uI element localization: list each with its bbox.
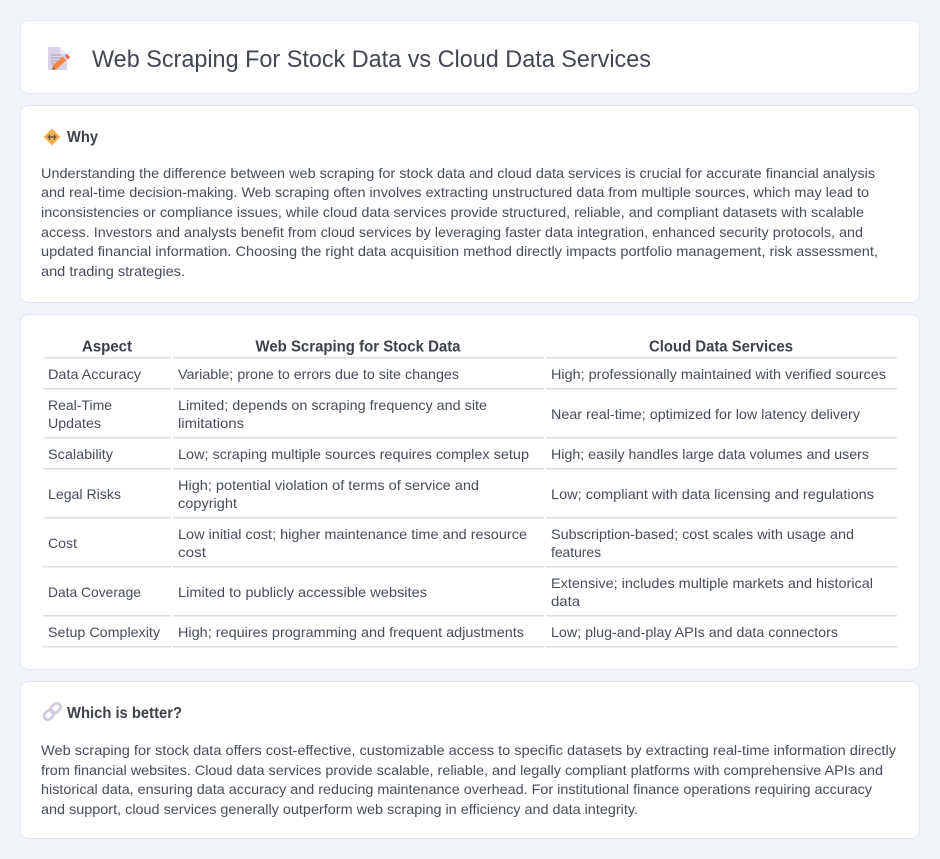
row: legal risks: High; potential violation of terms of service and [178, 477, 479, 493]
panel: header [20, 20, 920, 94]
text block: why paragraph: inconsistencies or compliance issues, while cloud data services provide structured, reliable, and compliant datasets with scalable [41, 204, 864, 220]
title: Web Scraping For Stock Data vs Cloud Data Services [92, 46, 651, 73]
icon: document with pencil [48, 47, 70, 70]
row: setup complexity [48, 624, 838, 640]
row: legal risks: copyright [178, 495, 237, 511]
panel: why [20, 106, 920, 302]
text block: verdict paragraph [41, 742, 896, 817]
row: real-time updates: Near real-time; optimized for low latency delivery [551, 406, 860, 422]
table header row: Cloud Data Services [649, 338, 793, 356]
icon: diamond warning sign [44, 128, 60, 146]
table header row: Web Scraping for Stock Data [256, 338, 461, 356]
panel: comparison table [20, 314, 920, 670]
row: setup complexity: High; requires programming and frequent adjustments [178, 624, 524, 640]
table header row: Aspect [82, 338, 133, 356]
row: real-time updates [48, 397, 860, 431]
row: data accuracy: Variable; prone to errors due to site changes [178, 366, 459, 382]
text block: verdict paragraph: and support, cloud services generally outperform web scraping in efficiency and data integrity. [41, 801, 638, 817]
row: setup complexity: Setup Complexity [48, 624, 160, 640]
row: real-time updates: limitations [178, 415, 244, 431]
row: data accuracy: High; professionally maintained with verified sources [551, 366, 886, 382]
row: scalability: High; easily handles large data volumes and users [551, 446, 869, 462]
row: real-time updates: Real-Time [48, 397, 112, 413]
panel: which is better [20, 682, 920, 838]
text block: why paragraph [41, 165, 878, 279]
heading: why: Why [67, 129, 98, 146]
icon: chain link [42, 702, 62, 721]
row: scalability: Scalability [48, 446, 113, 462]
text block: why paragraph: and trading strategies. [41, 263, 185, 279]
row: real-time updates: Updates [48, 415, 101, 431]
row: cost: features [551, 544, 601, 560]
row: data accuracy [48, 366, 886, 382]
row: cost: Cost [48, 535, 77, 551]
row: data coverage [48, 575, 873, 609]
row: cost [48, 526, 854, 560]
row: cost: cost [178, 544, 206, 560]
row: scalability: Low; scraping multiple sources requires complex setup [178, 446, 529, 462]
row: cost: Low initial cost; higher maintenance time and resource [178, 526, 527, 542]
row: setup complexity: Low; plug-and-play APIs and data connectors [551, 624, 838, 640]
row: data coverage: Data Coverage [48, 584, 141, 600]
row: scalability [48, 446, 869, 462]
row: real-time updates: Limited; depends on scraping frequency and site [178, 397, 487, 413]
row: legal risks: Legal Risks [48, 486, 121, 502]
text block: why paragraph: updated financial information. Choosing the right data acquisition method directly impacts portfolio management, risk assessment, [41, 243, 878, 259]
text block: why paragraph: and real-time decision-making. Web scraping often involves extracting unstructured data from multiple sources, which may lead to [41, 184, 869, 200]
row: cost: Subscription-based; cost scales with usage and [551, 526, 854, 542]
row: data coverage: Limited to publicly accessible websites [178, 584, 427, 600]
text block: verdict paragraph: historical data, ensuring data accuracy and reducing maintenance overhead. For institutional finance operations requiring accuracy [41, 781, 872, 797]
text block: verdict paragraph: from financial websites. Cloud data services provide scalable, reliable, and legally compliant platforms with comprehensive APIs and [41, 762, 883, 778]
text block: why paragraph: access. Investors and analysts benefit from cloud services by leveraging faster data integration, enhanced security protocols, and [41, 224, 863, 240]
row: legal risks [48, 477, 874, 511]
table header row [82, 338, 793, 356]
heading: which is better: Which is better? [67, 705, 182, 722]
row: data accuracy: Data Accuracy [48, 366, 141, 382]
row: data coverage: data [551, 593, 580, 609]
text block: verdict paragraph: Web scraping for stock data offers cost-effective, customizable access to specific datasets by extracting real-time information directly [41, 742, 896, 758]
row: legal risks: Low; compliant with data licensing and regulations [551, 486, 874, 502]
row: data coverage: Extensive; includes multiple markets and historical [551, 575, 873, 591]
text block: why paragraph: Understanding the difference between web scraping for stock data and cloud data services is crucial for accurate financial analysis [41, 165, 875, 181]
